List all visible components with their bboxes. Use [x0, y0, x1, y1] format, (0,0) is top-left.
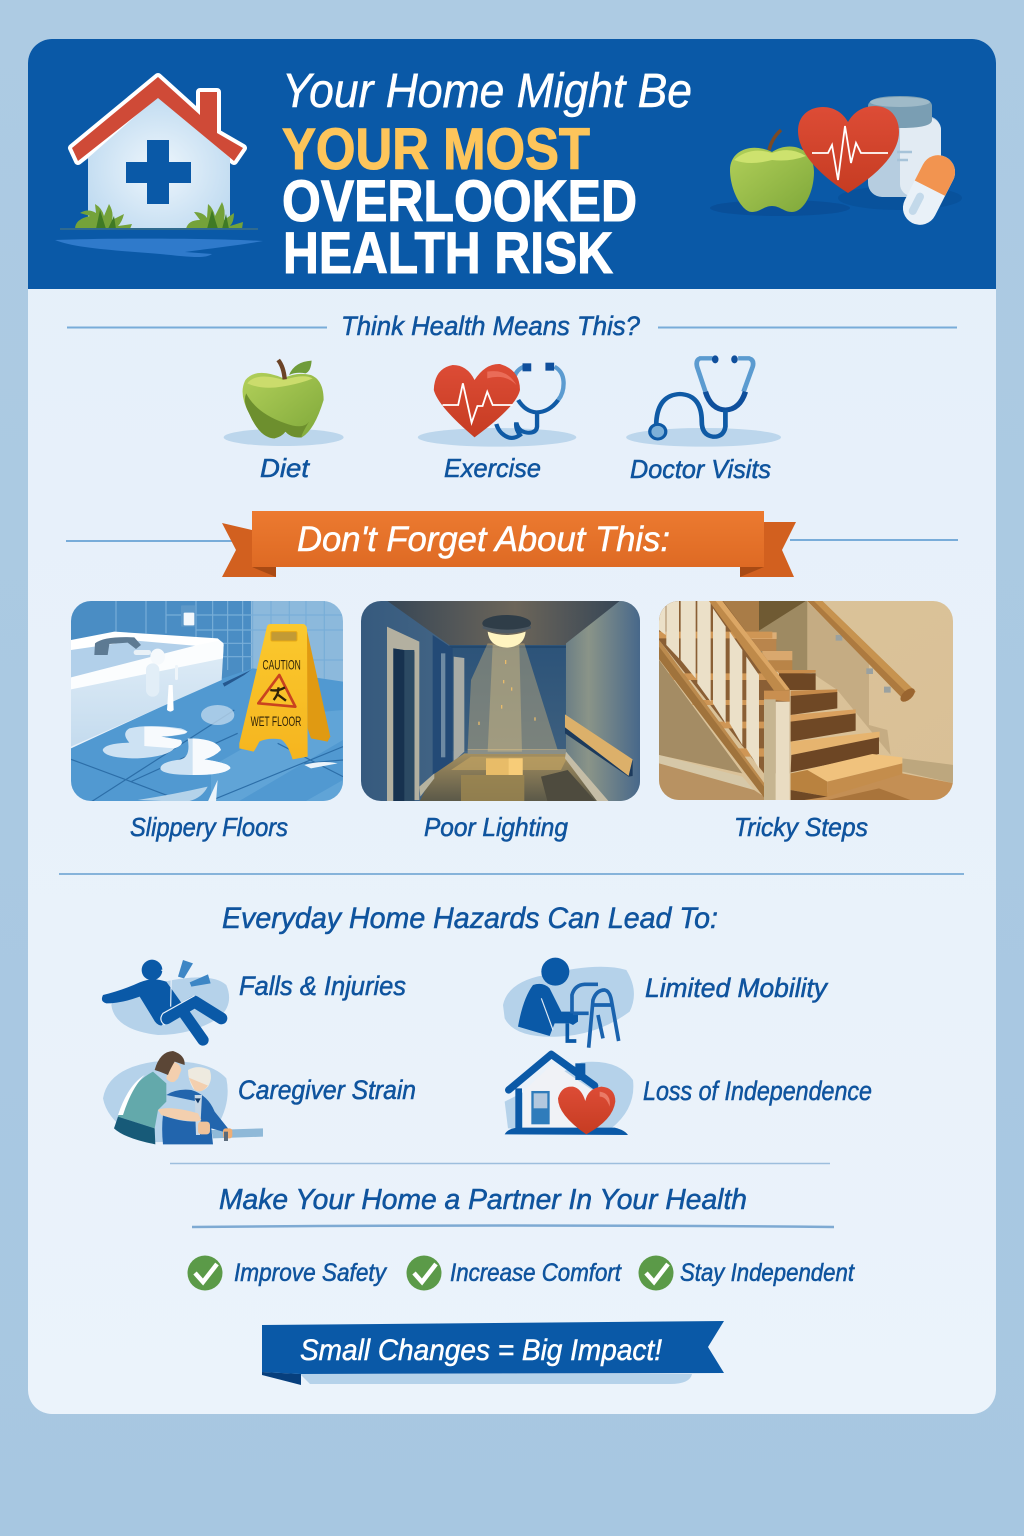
- photo: poor lighting: [361, 600, 641, 802]
- label: poor lighting: Poor Lighting: [424, 812, 568, 842]
- title: Your Home Might Be: [282, 65, 692, 118]
- label: loss of independence: Loss of Independence: [643, 1076, 872, 1106]
- label: diet: Diet: [260, 453, 311, 483]
- wet floor sign: [239, 624, 330, 759]
- icon: caregiver and older adult: [103, 1051, 263, 1144]
- label: falls and injuries: Falls & Injuries: [239, 971, 406, 1001]
- puddles: [103, 726, 187, 758]
- icon: bushes: [75, 202, 243, 229]
- label: limited mobility: Limited Mobility: [645, 973, 828, 1003]
- bathtub: [71, 642, 224, 747]
- icon: stethoscope: [626, 355, 781, 447]
- benefit: stay independent: [638, 1256, 855, 1290]
- wet floor sign: WET FLOOR: [251, 713, 301, 729]
- title: YOUR MOST: [282, 117, 590, 182]
- title: HEALTH RISK: [283, 221, 613, 286]
- label: caregiver strain: Caregiver Strain: [238, 1075, 416, 1105]
- balusters and rails: [659, 600, 790, 773]
- banner: don't forget about this: Don't Forget About This:: [297, 520, 670, 559]
- icon: house with medical cross: [55, 77, 263, 257]
- ribbon: small changes = big impact: Small Changes = Big Impact!: [300, 1334, 663, 1367]
- ribbon: small changes = big impact: [262, 1321, 724, 1385]
- label: doctor visits: Doctor Visits: [630, 454, 771, 484]
- pill jar: [868, 96, 941, 197]
- heading: everyday home hazards: Everyday Home Hazards Can Lead To:: [222, 902, 718, 935]
- benefit: increase comfort: [406, 1256, 622, 1290]
- icon: heart and stethoscope: [418, 363, 576, 447]
- icon: house and heart: [505, 1054, 633, 1135]
- icons: think health row: [224, 355, 781, 447]
- apple: [730, 130, 814, 212]
- title: [282, 65, 692, 286]
- label: tricky steps: Tricky Steps: [734, 812, 868, 842]
- staircase: [747, 632, 902, 802]
- benefit: increase comfort: Increase Comfort: [450, 1259, 622, 1287]
- capsule: [897, 149, 961, 231]
- photo: tricky steps: [659, 600, 954, 802]
- benefit: improve safety: [188, 1256, 387, 1290]
- photo: slippery floors: [71, 600, 343, 802]
- icon: diet apple: [224, 360, 344, 446]
- benefit: stay independent: Stay Independent: [680, 1259, 855, 1287]
- benefit: improve safety: Improve Safety: [234, 1259, 387, 1287]
- icon: person with walker: [503, 958, 634, 1048]
- banner: don't forget about this: [66, 511, 958, 577]
- heart with pulse: [798, 106, 899, 193]
- heading: Make Your Home a Partner In Your Health: [219, 1184, 747, 1216]
- label: slippery floors: Slippery Floors: [130, 812, 288, 842]
- panel: header: [28, 39, 996, 289]
- icon: apple, heart, jar and pill: [710, 96, 962, 231]
- icon: falling person: [102, 960, 229, 1040]
- heading: Think Health Means This?: [341, 311, 640, 341]
- label: exercise: Exercise: [444, 453, 541, 483]
- title: OVERLOOKED: [282, 169, 637, 234]
- wet floor sign: CAUTION: [262, 656, 301, 672]
